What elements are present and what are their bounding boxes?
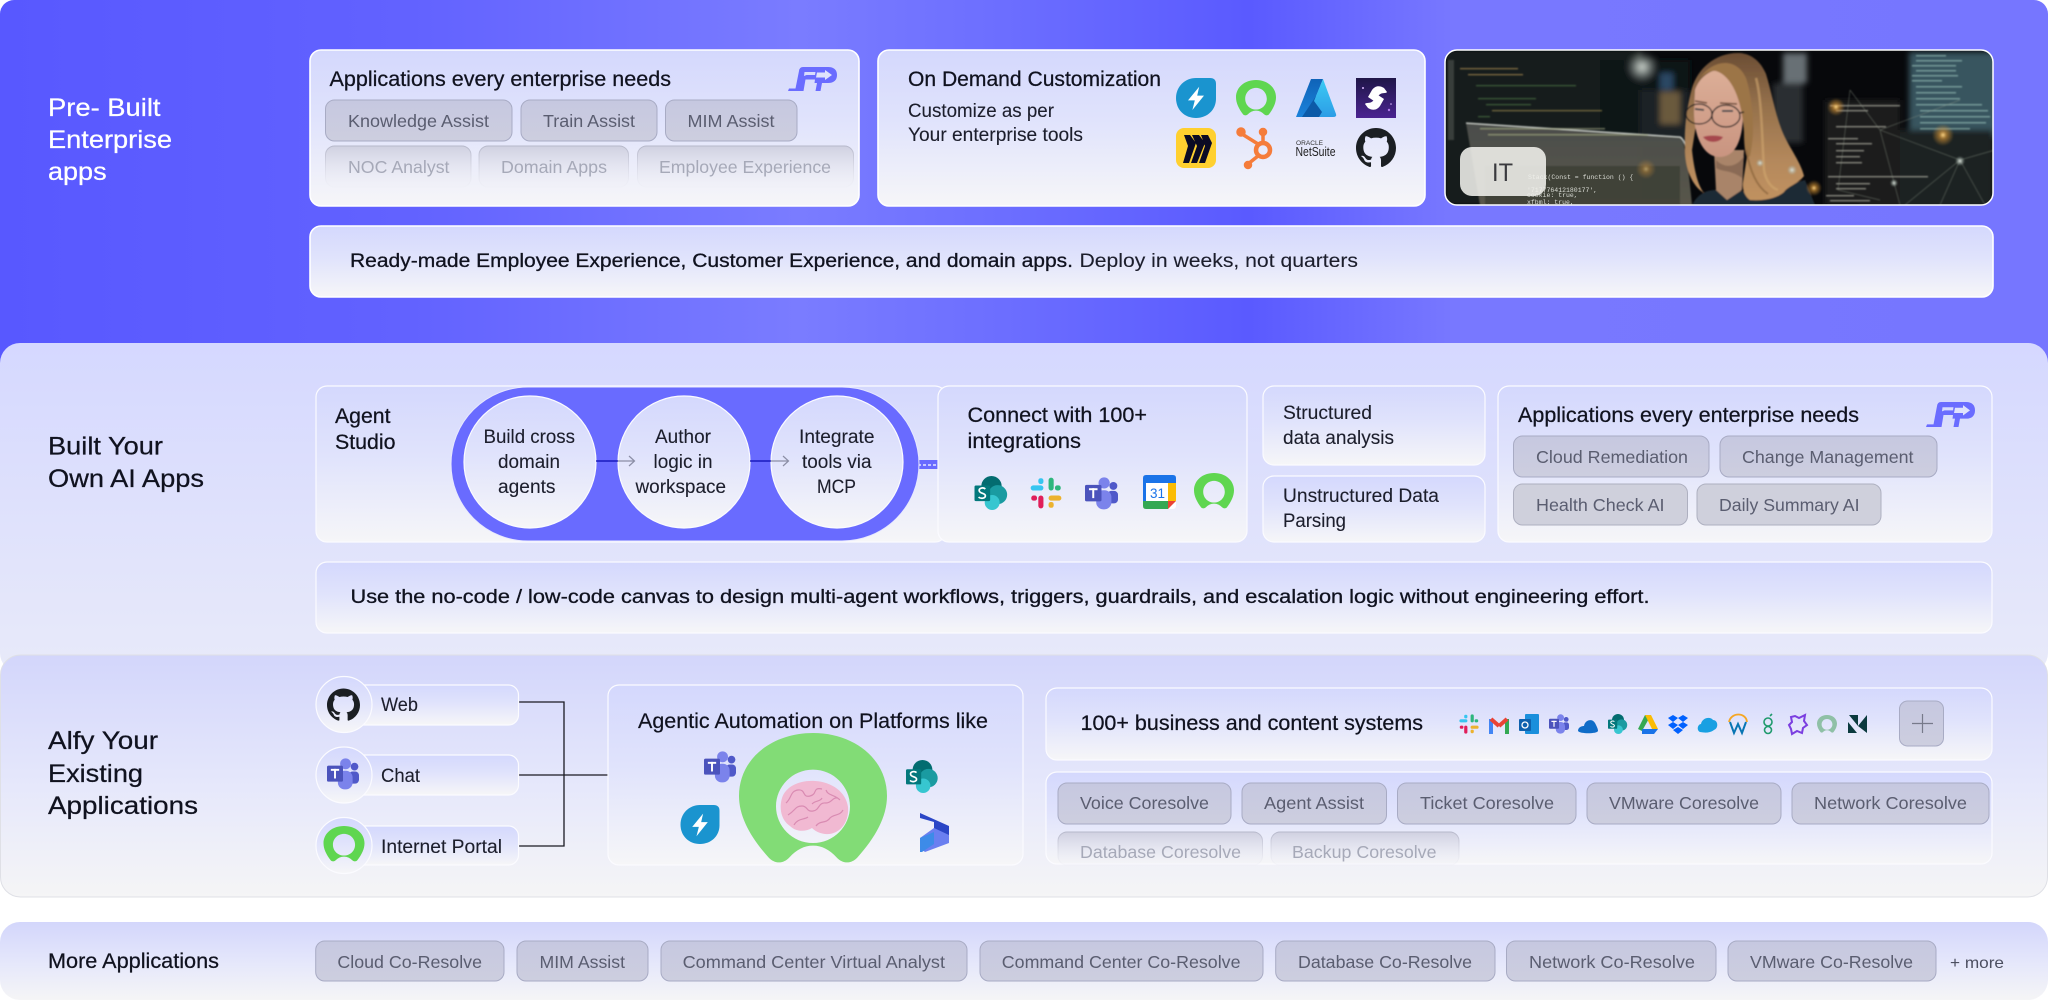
chip: Command Center Co-Resolve <box>980 941 1263 981</box>
icon: dynamics <box>920 813 949 852</box>
heading: Applications every enterprise needs <box>1518 404 1859 427</box>
icon: green ring <box>1236 80 1276 115</box>
badge: IT <box>1460 147 1546 196</box>
step: author logic in workspace: Author <box>655 427 712 448</box>
chip: Network Coresolve: Network Coresolve <box>1814 793 1967 813</box>
chip: NOC Analyst <box>326 146 471 187</box>
icon: gmail <box>1491 719 1507 734</box>
chip: Employee Experience <box>638 146 854 187</box>
panel: structured data analysis: data analysis <box>1283 428 1394 449</box>
photo: woman at laptop with IT badge <box>1445 50 1999 210</box>
icon: zendesk <box>1848 715 1867 733</box>
panel: agentic automation <box>608 685 1023 865</box>
icon: github <box>1356 128 1396 167</box>
chip: Agent Assist: Agent Assist <box>1264 793 1364 813</box>
icon: hubspot <box>1238 129 1270 168</box>
heading: Agentic Automation on Platforms like <box>638 710 988 733</box>
step: build cross domain agents: agents <box>498 477 556 498</box>
heading: integrations <box>968 430 1081 453</box>
chip: Voice Coresolve <box>1058 783 1231 824</box>
chip: Ticket Coresolve: Ticket Coresolve <box>1420 793 1554 813</box>
icon: ring <box>1817 715 1837 733</box>
section: build your own AI apps <box>0 343 2048 673</box>
photo: woman at laptop with IT badge: Stack(Const = function () { <box>1528 174 1633 181</box>
chip: Agent Assist <box>1242 783 1386 824</box>
photo: woman at laptop with IT badge: '717776412180177', <box>1527 187 1597 194</box>
icon: workday <box>1729 714 1747 733</box>
icon: green ring <box>324 826 364 861</box>
icon: brain <box>781 781 848 834</box>
chip: MIM Assist: MIM Assist <box>540 952 625 972</box>
heading: Agent <box>335 405 391 428</box>
chip: Change Management: Change Management <box>1742 447 1914 467</box>
icon: teams <box>327 758 359 789</box>
step: author logic in workspace <box>618 396 750 528</box>
chip: Network Co-Resolve <box>1506 941 1716 981</box>
connector lines <box>518 702 608 846</box>
icon: sharepoint <box>906 760 938 793</box>
panel: unstructured data parsing: Unstructured Data <box>1283 486 1439 507</box>
heading: Alfy Your Existing Applications: Existing <box>48 760 143 788</box>
icon: onedrive <box>1578 720 1598 733</box>
chip: MIM Assist <box>666 100 797 141</box>
panel: applications second <box>1498 386 1992 542</box>
connector <box>903 460 940 469</box>
icon: miro <box>1176 128 1216 168</box>
chip: Command Center Co-Resolve: Command Center Co-Resolve <box>1002 952 1240 972</box>
step: build cross domain agents: Build cross <box>484 427 575 448</box>
icon: oracle netsuite: ORACLE <box>1296 141 1323 147</box>
icon: calendar <box>1143 475 1176 509</box>
lips <box>1703 136 1723 142</box>
icon: oracle netsuite <box>1296 141 1336 159</box>
panel: structured data analysis <box>1263 386 1485 465</box>
face <box>1694 70 1743 157</box>
heading: Studio <box>335 431 396 454</box>
chip: Train Assist: Train Assist <box>543 111 635 131</box>
chip: Database Coresolve <box>1058 832 1262 865</box>
icon: calendar: 31 <box>1150 485 1165 501</box>
icon: freshdesk <box>1176 78 1216 118</box>
icon: sharepoint <box>974 476 1007 510</box>
channel: internet portal <box>316 818 518 874</box>
panel: on demand customization <box>878 50 1425 206</box>
icon: brand logo <box>1926 402 1975 427</box>
panel: 100+ business and content systems: 100+ business and content systems <box>1080 712 1423 735</box>
heading: Alfy Your Existing Applications: Applications <box>48 792 198 820</box>
top right panel <box>1912 55 1990 130</box>
chip: Employee Experience: Employee Experience <box>659 157 831 177</box>
chip: Database Coresolve: Database Coresolve <box>1080 842 1241 862</box>
icon: brand logo <box>788 67 837 91</box>
chip: VMware Co-Resolve: VMware Co-Resolve <box>1750 952 1913 972</box>
heading: Applications every enterprise needs <box>330 68 671 91</box>
chip: Backup Coresolve: Backup Coresolve <box>1292 842 1436 862</box>
heading: Alfy Your Existing Applications: Alfy Your <box>48 727 158 755</box>
section: more applications <box>0 922 2048 1000</box>
arrow 2 <box>750 456 788 466</box>
heading: Built Your Own AI Apps: Own AI Apps <box>48 465 204 493</box>
chip: Cloud Co-Resolve: Cloud Co-Resolve <box>337 952 482 972</box>
laptop <box>1466 123 1692 205</box>
step: integrate tools via MCP <box>771 396 903 528</box>
button: plus <box>1900 701 1944 746</box>
banner: ready-made apps: Deploy in weeks, not quarters <box>1080 251 1358 272</box>
icon: oracle netsuite: NetSuite <box>1296 144 1336 159</box>
text block: Customize as per <box>908 101 1055 122</box>
heading: Built Your Own AI Apps <box>48 432 204 493</box>
icon: teams <box>1085 477 1118 509</box>
channel: web <box>316 676 518 732</box>
chip: Knowledge Assist: Knowledge Assist <box>348 111 489 131</box>
panel: structured data analysis: Structured <box>1283 403 1372 424</box>
icon: slack <box>1459 714 1479 734</box>
badge: IT: IT <box>1492 159 1513 187</box>
icon: slack <box>1031 478 1061 508</box>
eyes and brows <box>1695 101 1737 104</box>
chip: Domain Apps <box>479 146 628 187</box>
chip: Cloud Remediation: Cloud Remediation <box>1536 447 1688 467</box>
heading: Connect with 100+ <box>968 404 1147 427</box>
chip: Knowledge Assist <box>326 100 512 141</box>
banner: no-code canvas: Use the no-code / low-code canvas to design multi-agent workflows, triggers, guardrails, and escalation logic without engineering effort. <box>350 587 1650 608</box>
chip: Ticket Coresolve <box>1398 783 1576 824</box>
heading: Pre-Built Enterprise apps <box>48 94 172 186</box>
chip: VMware Coresolve <box>1587 783 1781 824</box>
chip: Train Assist <box>521 100 657 141</box>
channel: internet portal: Internet Portal <box>381 837 502 858</box>
chip: Cloud Co-Resolve <box>316 941 504 981</box>
chip: Database Co-Resolve <box>1276 941 1495 981</box>
chip: Health Check AI: Health Check AI <box>1536 495 1664 515</box>
icon: outlook <box>1519 714 1539 734</box>
icon: freshdesk <box>680 805 720 844</box>
panel: connect with integrations <box>938 386 1247 542</box>
chip: Daily Summary AI: Daily Summary AI <box>1719 495 1860 515</box>
panel: coresolve applications <box>1046 772 1992 865</box>
chip: MIM Assist <box>517 941 648 981</box>
chip: Daily Summary AI <box>1697 484 1881 525</box>
heading <box>335 405 396 454</box>
icon: sharepoint <box>1608 714 1627 734</box>
heading: Pre-Built Enterprise apps: Pre- Built <box>48 94 161 122</box>
chip: Network Coresolve <box>1792 783 1989 824</box>
text block: Your enterprise tools <box>908 125 1083 146</box>
icon: big green ring <box>739 733 887 862</box>
heading: Built Your Own AI Apps: Built Your <box>48 432 163 460</box>
channel: chat: Chat <box>381 766 421 787</box>
photo: woman at laptop with IT badge: cookie: true, <box>1527 192 1578 199</box>
step: build cross domain agents: domain <box>498 452 560 473</box>
channel: web: Web <box>381 695 418 716</box>
section: alfy your existing applications <box>0 655 2048 897</box>
pill: workflow <box>451 387 919 541</box>
channel: chat <box>316 747 518 803</box>
chip: VMware Coresolve: VMware Coresolve <box>1609 793 1759 813</box>
step: integrate tools via MCP: Integrate <box>799 427 874 448</box>
text block <box>908 101 1083 146</box>
code panels <box>1460 68 1523 75</box>
icon: chain square <box>1356 78 1396 118</box>
arrow 1 <box>596 456 634 466</box>
panel: applications every enterprise needs <box>310 50 859 206</box>
icon: google drive <box>1638 715 1658 734</box>
heading: Alfy Your Existing Applications <box>48 727 198 820</box>
glasses <box>1686 104 1744 127</box>
photo: woman at laptop with IT badge: xfbml: true, <box>1527 199 1574 206</box>
heading: More Applications <box>48 950 219 973</box>
step: integrate tools via MCP: tools via <box>802 452 872 473</box>
icon: github <box>327 688 360 721</box>
chip: VMware Co-Resolve <box>1728 941 1936 981</box>
panel: unstructured data parsing <box>1263 476 1485 542</box>
chip: Command Center Virtual Analyst: Command Center Virtual Analyst <box>683 952 945 972</box>
shirt <box>1692 180 1815 205</box>
fringe <box>1700 63 1753 157</box>
banner: ready-made apps <box>310 226 1993 297</box>
icon: teams <box>704 751 736 782</box>
chip: Health Check AI <box>1514 484 1688 525</box>
icon: green ring <box>1194 473 1234 508</box>
heading: Pre-Built Enterprise apps: apps <box>48 158 107 186</box>
panel: 100+ business and content systems <box>1046 688 1992 760</box>
icon: purple star <box>1789 715 1807 734</box>
glows <box>1827 98 1845 116</box>
icon: azure <box>1296 79 1336 117</box>
chip: Database Co-Resolve: Database Co-Resolve <box>1298 952 1472 972</box>
banner: no-code canvas <box>316 562 1992 633</box>
heading <box>968 404 1147 453</box>
step: integrate tools via MCP: MCP <box>817 477 856 498</box>
icon: teams <box>1549 714 1569 734</box>
hair back <box>1685 53 1804 200</box>
step: author logic in workspace: logic in <box>654 452 712 473</box>
chip: Cloud Remediation <box>1514 436 1709 477</box>
chip: Backup Coresolve <box>1271 832 1459 865</box>
chip: Domain Apps: Domain Apps <box>501 157 607 177</box>
network <box>1838 90 1995 205</box>
chip: Network Co-Resolve: Network Co-Resolve <box>1529 952 1695 972</box>
label: + more: + more <box>1950 955 2004 972</box>
heading: On Demand Customization <box>908 68 1161 91</box>
icon: dropbox <box>1668 715 1688 734</box>
step: author logic in workspace: workspace <box>635 477 726 498</box>
banner: ready-made apps: Ready-made Employee Experience, Customer Experience, and domain apps. <box>350 251 1073 272</box>
chip: Voice Coresolve: Voice Coresolve <box>1080 793 1209 813</box>
chip: Change Management <box>1720 436 1937 477</box>
icon: green g <box>1764 714 1772 734</box>
heading: Pre-Built Enterprise apps: Enterprise <box>48 126 172 154</box>
chip: MIM Assist: MIM Assist <box>688 111 775 131</box>
right code panel <box>1826 105 1928 201</box>
step: build cross domain agents <box>464 396 596 528</box>
section: pre-built enterprise apps <box>0 0 2048 380</box>
icon: salesforce <box>1698 718 1717 733</box>
chip: NOC Analyst: NOC Analyst <box>348 157 450 177</box>
chip: Command Center Virtual Analyst <box>661 941 967 981</box>
panel: agent studio <box>316 386 946 542</box>
neck <box>1714 150 1744 200</box>
panel: unstructured data parsing: Parsing <box>1283 511 1346 532</box>
